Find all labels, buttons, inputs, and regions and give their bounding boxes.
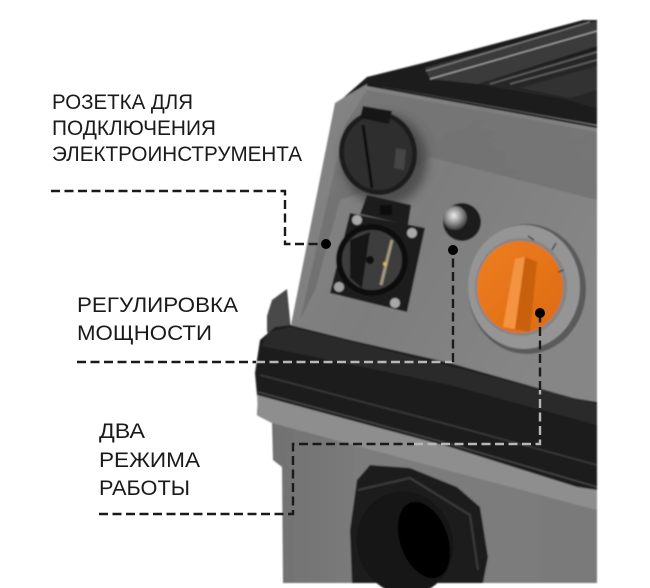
label: two operating modes: РАБОТЫ [99,477,190,500]
label: socket for power tools: ЭЛЕКТРОИНСТРУМЕНТА [52,143,302,166]
socket cover shadow [343,114,427,206]
mode dial [468,224,586,354]
band highlight face [262,327,597,425]
label: socket for power tools [52,91,302,166]
black horizontal band [255,325,597,490]
band lower groove [258,392,597,487]
product illustration: vacuum cleaner body [255,20,597,588]
label: two operating modes [99,420,200,500]
socket plate [330,213,425,312]
lower body housing [257,395,597,583]
label: socket for power tools: ПОДКЛЮЧЕНИЯ [52,117,216,140]
label: power regulation [77,294,238,345]
callout line: power regulation [77,245,458,362]
label: power regulation: РЕГУЛИРОВКА [77,294,238,317]
label: two operating modes: ДВА [99,420,145,443]
open socket cover [332,105,424,225]
callout line: socket [51,191,331,249]
side bump behind band [267,289,291,332]
callout line: two modes [99,308,545,514]
lid ribs [367,21,597,127]
black top lid [343,20,597,125]
lower body light lip [257,392,597,510]
label: power regulation: МОЩНОСТИ [77,322,212,345]
upper grey control panel [290,83,597,410]
label: socket for power tools: РОЗЕТКА ДЛЯ [52,91,193,114]
label: two operating modes: РЕЖИМА [99,449,200,472]
power knob [443,203,481,241]
vacuum hose port [342,465,488,588]
upper panel shaded recess [300,90,597,320]
